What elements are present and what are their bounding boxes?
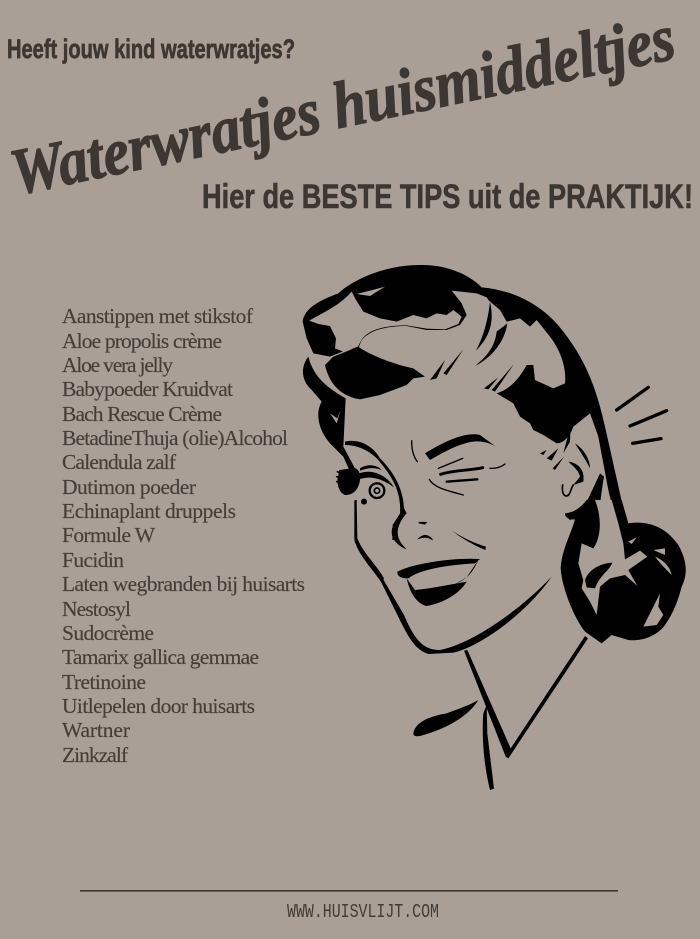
remedies list: Sudocrème xyxy=(62,621,154,645)
remedies list: Fucidin xyxy=(62,548,124,572)
remedies list: Calendula zalf xyxy=(62,450,177,474)
remedies list xyxy=(62,304,305,767)
remedies list: Uitlepelen door huisarts xyxy=(62,694,255,718)
remedies list: Aloe propolis crème xyxy=(62,329,222,353)
remedies list: BetadineThuja (olie)Alcohol xyxy=(62,426,288,450)
remedies list: Bach Rescue Crème xyxy=(62,402,222,426)
remedies list: Babypoeder Kruidvat xyxy=(62,377,233,401)
collar xyxy=(464,636,588,758)
remedies list: Tamarix gallica gemmae xyxy=(62,645,259,669)
remedies list: Tretinoine xyxy=(62,670,146,694)
motion lines xyxy=(617,387,667,443)
remedies list: Echinaplant druppels xyxy=(62,499,236,523)
remedies list: Wartner xyxy=(62,718,130,742)
lower head: mouth, chin and collar xyxy=(355,500,588,790)
upper head: hair, eyes and brows xyxy=(303,265,667,540)
hair bun xyxy=(561,500,686,643)
remedies list: Laten wegbranden bij huisarts xyxy=(62,572,305,596)
remedies list: Aloe vera jelly xyxy=(62,353,173,377)
footer rule xyxy=(80,890,618,892)
remedies list: Zinkzalf xyxy=(62,743,129,767)
remedies list: Formule W xyxy=(62,523,156,547)
remedies list: Dutimon poeder xyxy=(62,475,196,499)
illustration: winking woman xyxy=(303,265,686,790)
intro heading: Heeft jouw kind waterwratjes? xyxy=(7,34,295,64)
remedies list: Aanstippen met stikstof xyxy=(62,304,254,328)
remedies list: Nestosyl xyxy=(62,597,131,621)
website: WWW.HUISVLIJT.COM xyxy=(287,901,439,923)
